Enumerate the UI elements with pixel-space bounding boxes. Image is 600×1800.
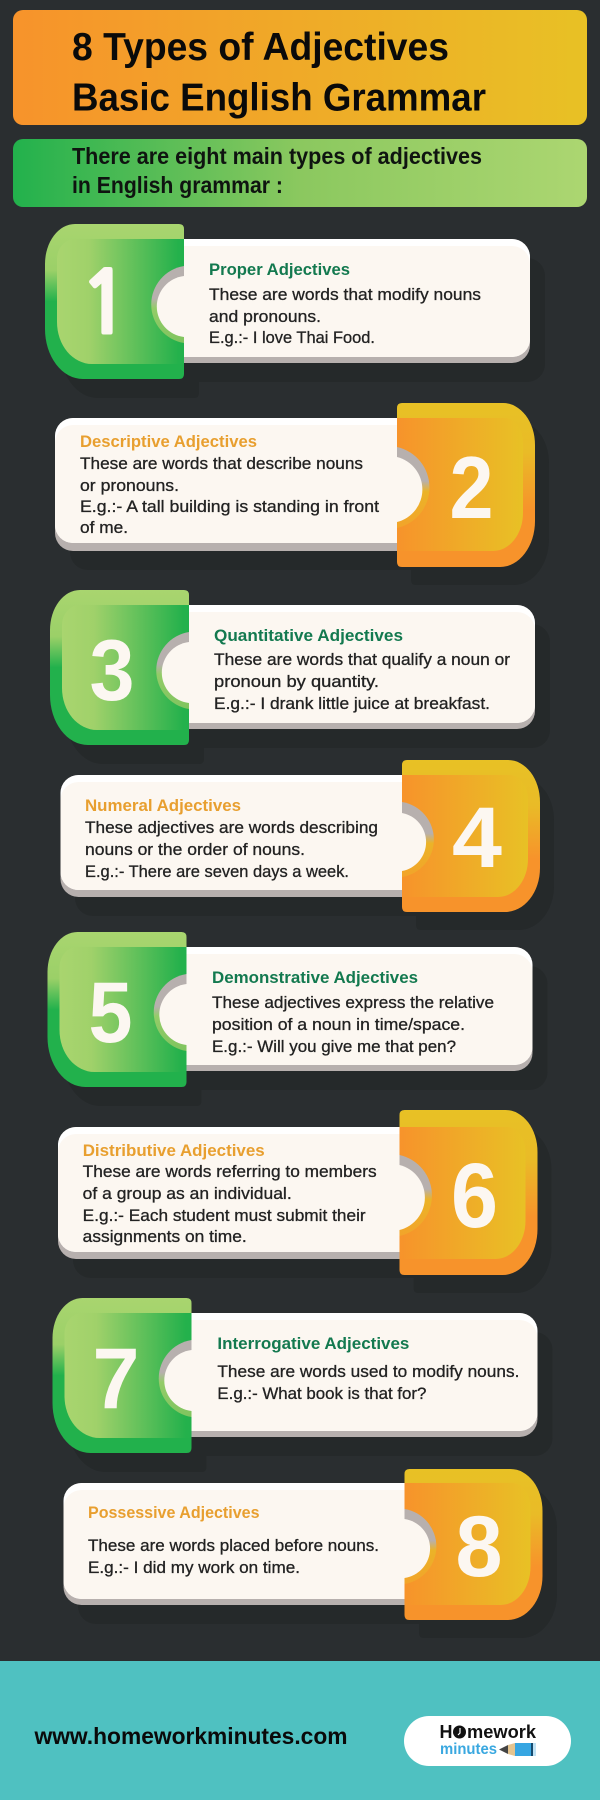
number 2: 2 [450,438,494,537]
card 1: proper adjectives [45,224,545,398]
card 2 text: These are words that describe nouns [80,454,363,473]
card 5 shapes [48,932,548,1106]
card 1 text [209,260,481,347]
card 7: interrogative adjectives [52,1298,552,1472]
card 4 text [85,796,378,881]
number 1: 1 [79,261,131,346]
card 1 text: E.g.:- I love Thai Food. [209,328,375,347]
icon: pencil [499,1743,536,1756]
card 5 text: These adjectives express the relative [212,993,494,1012]
card 4: numeral adjectives [60,760,554,930]
card 8 text: E.g.:- I did my work on time. [88,1558,300,1577]
card 6 text: of a group as an individual. [83,1184,292,1203]
footer band [0,1661,600,1800]
logo badge: minutes [440,1741,497,1758]
card 1 text: Proper Adjectives [209,260,350,279]
card 6 text: E.g.:- Each student must submit their [83,1206,366,1225]
logo badge: mework [467,1722,537,1742]
number 6: 6 [451,1145,498,1247]
card 6 text: These are words referring to members [83,1162,377,1181]
card 2 text [80,432,379,537]
card 2 shapes [55,403,549,585]
number 8: 8 [456,1499,502,1595]
card 4 text: E.g.:- There are seven days a week. [85,862,349,881]
card 3 text [214,626,510,713]
card 3: quantitative adjectives [50,590,550,764]
logo badge [404,1716,571,1766]
card 7 text: These are words used to modify nouns. [217,1362,519,1381]
icon: clock [453,1726,466,1738]
card 4 text: These adjectives are words describing [85,818,378,837]
card 6 text: Distributive Adjectives [83,1141,265,1160]
card 3 text: pronoun by quantity. [214,672,379,691]
number 3: 3 [90,623,134,719]
number 5: 5 [88,965,132,1061]
title text: 8 Types of Adjectives [72,26,449,69]
card 1 text: These are words that modify nouns [209,285,481,304]
card 5 text: Demonstrative Adjectives [212,968,418,987]
card 5: demonstrative adjectives [48,932,548,1106]
card 2 text: or pronouns. [80,476,179,495]
number 4: 4 [452,790,502,886]
logo badge: H [440,1722,452,1742]
card 4 shapes [60,760,554,930]
card 2 text: E.g.:- A tall building is standing in front [80,497,379,516]
card 8 text: Possessive Adjectives [88,1503,260,1522]
card 1 shapes [45,224,545,398]
card 2: descriptive adjectives [55,403,549,585]
card 4 text: Numeral Adjectives [85,796,241,815]
card 2 text: of me. [80,518,128,537]
card 8: possessive adjectives [64,1469,557,1638]
card 7 text: E.g.:- What book is that for? [217,1384,426,1403]
title banner [13,10,587,125]
card 3 text: These are words that qualify a noun or [214,650,510,669]
card 3 text: E.g.:- I drank little juice at breakfast. [214,694,490,713]
card 3 text: Quantitative Adjectives [214,626,403,645]
intro text: There are eight main types of adjectives [72,143,482,169]
card 5 text: E.g.:- Will you give me that pen? [212,1037,456,1056]
card 2 text: Descriptive Adjectives [80,432,257,451]
card 6 text [83,1141,377,1246]
card 7 text: Interrogative Adjectives [217,1334,409,1353]
card 5 text [212,968,494,1056]
intro text [72,143,482,198]
card 5 text: position of a noun in time/space. [212,1015,465,1034]
card 6: distributive adjectives [58,1110,552,1293]
number 7: 7 [92,1331,140,1427]
title text: Basic English Grammar [72,76,486,120]
card 8 text: These are words placed before nouns. [88,1536,379,1555]
website url: www.homeworkminutes.com [34,1723,347,1749]
card 7 text [217,1334,519,1403]
card 8 shapes [64,1469,557,1638]
card 4 text: nouns or the order of nouns. [85,840,305,859]
card 3 shapes [50,590,550,764]
intro text: in English grammar : [72,172,283,198]
card 6 text: assignments on time. [83,1227,247,1246]
card 7 shapes [52,1298,552,1472]
title text [72,26,486,120]
card 8 text [88,1503,379,1577]
card 6 shapes [58,1110,552,1293]
intro banner [13,139,587,207]
card 1 text: and pronouns. [209,307,321,326]
